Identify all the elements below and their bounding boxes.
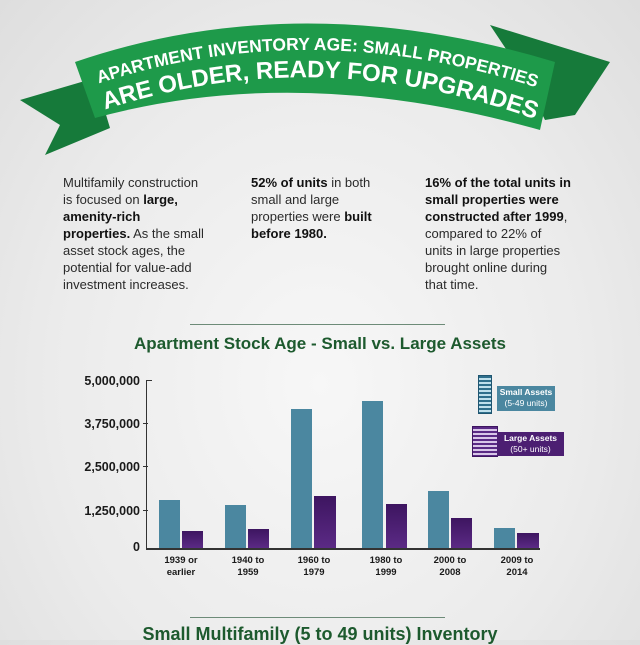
text block: construction focus: amenity-rich [63,209,140,224]
bar chart: 3,750,000 [84,417,140,431]
bar chart: 1940 to [232,555,264,566]
bar chart: 1960 to [298,555,330,566]
text block: 16%: that time. [425,277,478,292]
text block: construction focus: asset stock ages, the [63,243,185,258]
banner title: APARTMENT INVENTORY AGE: SMALL PROPERTIES [99,38,538,86]
text block: 16%: constructed after 1999, [425,209,567,224]
chart title: Apartment Stock Age - Small vs. Large Assets [134,334,506,353]
text block: 16%: brought online during [425,260,547,275]
bar chart: 2000 to [434,555,466,566]
legend: small assets: Small Assets [500,387,552,397]
bar chart: 2014 [506,567,528,578]
text block: 16%: 16% of the total units in [425,175,571,190]
bar chart: 1959 [237,567,259,578]
text block: construction focus: properties. As the small [63,226,204,241]
x labels: 1939 or [164,555,198,566]
text block: 52%: 52% of units in both [251,175,370,190]
bar chart: 1999 [375,567,397,578]
x labels [164,555,198,578]
text block: construction focus: Multifamily construction [63,175,198,190]
bar chart: 1979 [303,567,325,578]
bar chart: 2,500,000 [84,460,140,474]
bars [159,500,180,548]
legend: small assets [478,375,555,414]
legend: large assets: Large Assets [504,433,557,443]
legend: small assets: (5-49 units) [504,398,548,408]
text block: 52%: before 1980. [251,226,327,241]
bar chart: 1,250,000 [84,504,140,518]
text block: construction focus: potential for value-add [63,260,192,275]
text block: 52%: properties were built [251,209,372,224]
banner title [20,24,610,155]
bar chart: 2008 [439,567,461,578]
text block: 16% [425,175,571,292]
text block: 16%: units in large properties [425,243,560,258]
text block: construction focus [63,175,204,292]
bar chart: 2009 to [501,555,533,566]
legend: large assets: (50+ units) [510,444,551,454]
y axis labels: 5,000,000 [84,374,140,388]
text block: 16%: small properties were [425,192,559,207]
x labels: earlier [167,567,195,578]
text block: 52%: small and large [251,192,339,207]
icon: wide building [472,426,498,457]
icon: tall building [478,375,492,414]
bar chart: 0 [133,540,140,554]
left ribbon tail [20,78,110,155]
right ribbon tail [490,25,610,120]
text block: 52% [251,175,372,241]
text block: construction focus: investment increases. [63,277,189,292]
legend: large assets [472,426,564,457]
bar chart: 1980 to [370,555,402,566]
text block: 16%: compared to 22% of [425,226,541,241]
section title: small multifamily inventory: Small Multifamily (5 to 49 units) Inventory [142,624,498,644]
bar chart [84,374,564,578]
text block: construction focus: is focused on large, [63,192,178,207]
banner title: ARE OLDER, READY FOR UPGRADES [106,60,538,118]
